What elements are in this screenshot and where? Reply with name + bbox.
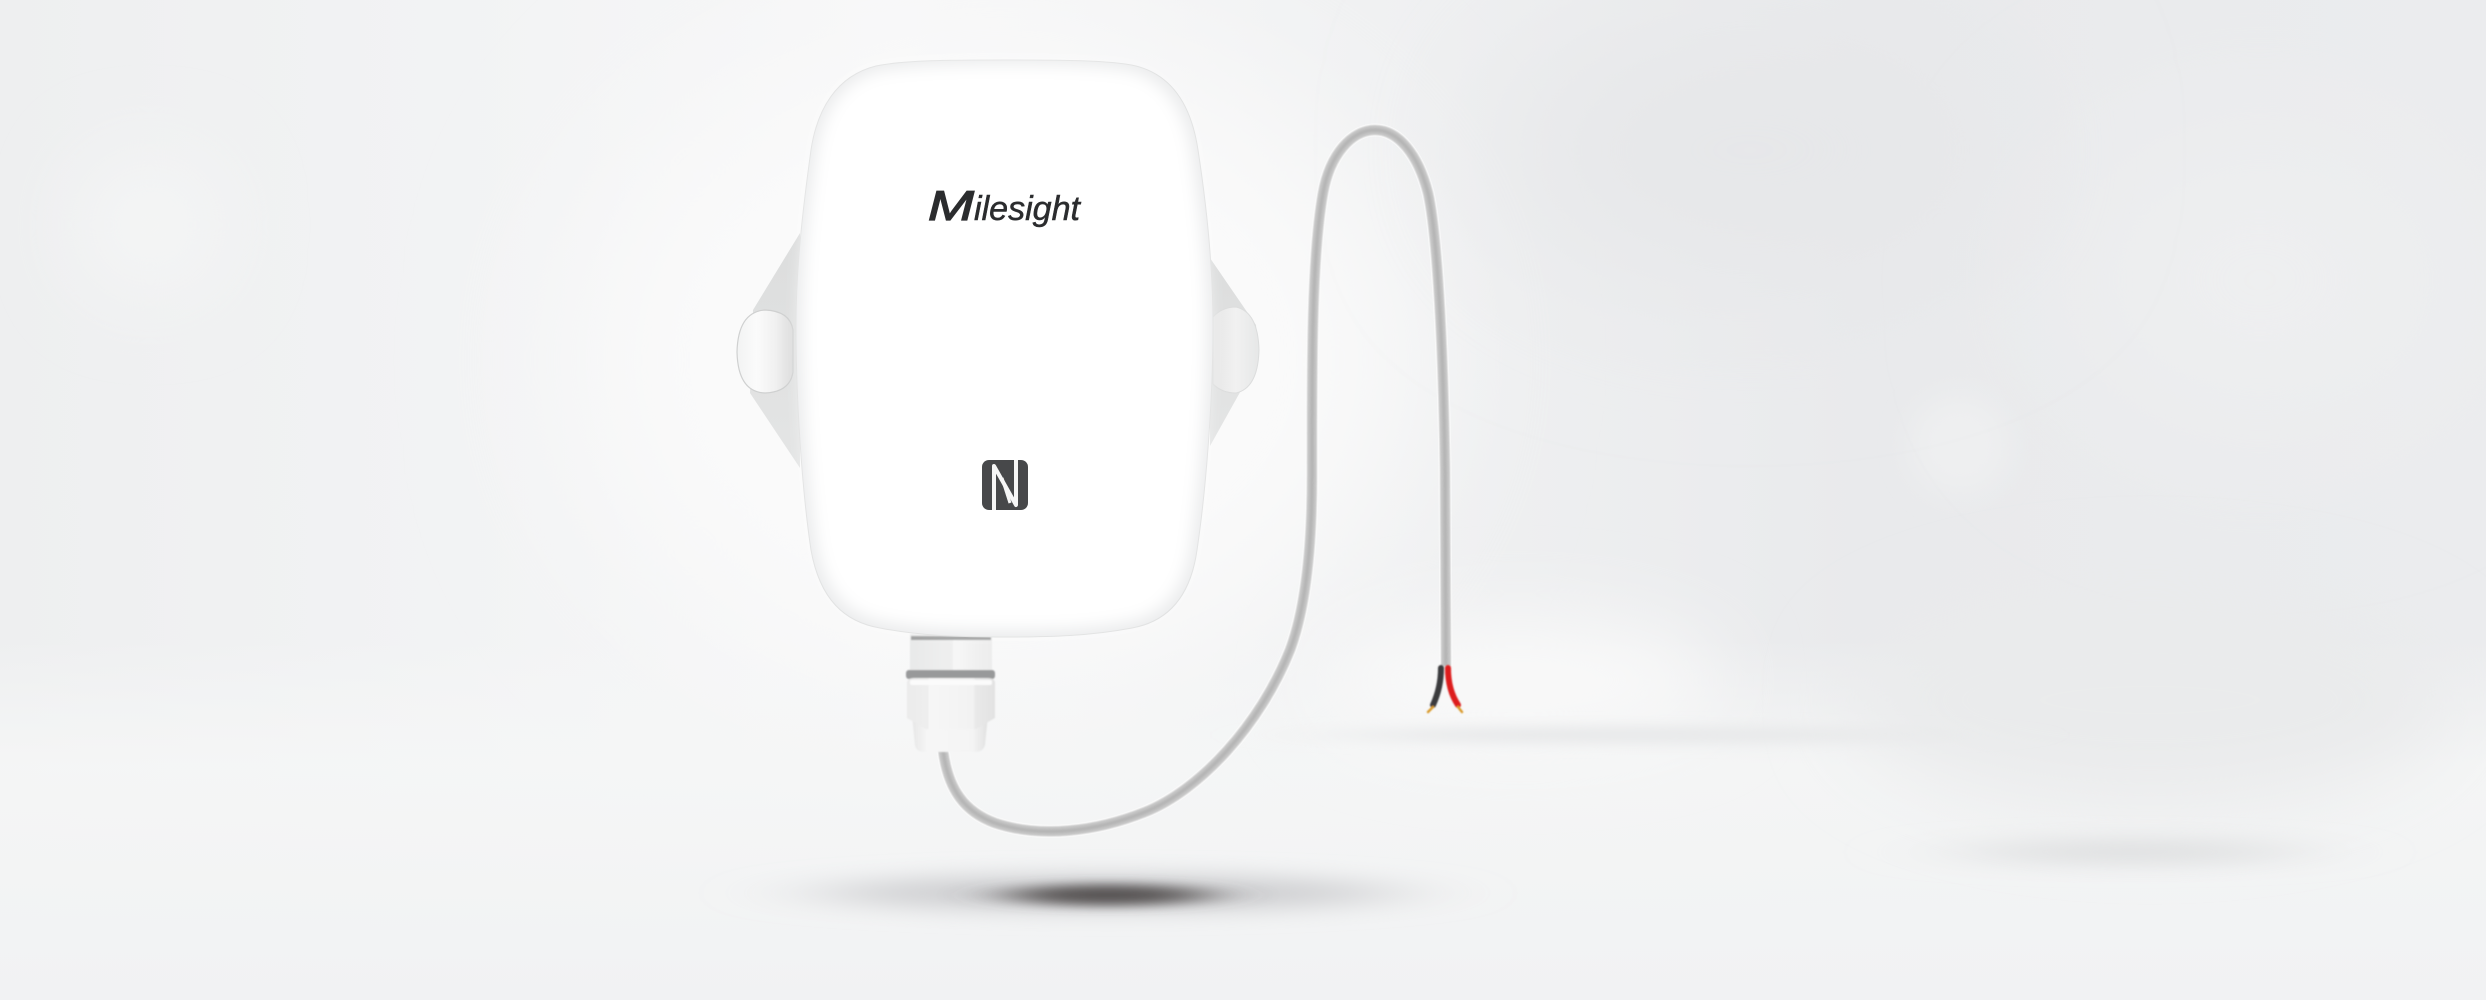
NFC icon — [982, 460, 1028, 510]
stripped wires — [1428, 668, 1462, 712]
copper tips — [1428, 707, 1462, 712]
mounting ear right — [1210, 258, 1259, 446]
right knob — [1213, 307, 1259, 393]
left knob — [737, 310, 793, 393]
thread ring — [906, 670, 995, 679]
lower hex nut — [907, 678, 995, 729]
floor shadow — [818, 875, 1398, 911]
cable — [943, 130, 1446, 831]
red wire — [1448, 668, 1458, 705]
black wire — [1433, 668, 1441, 705]
cable gland — [906, 634, 995, 752]
brand logo: M — [928, 182, 974, 229]
brand logo: ilesight — [974, 190, 1082, 228]
upper hex nut — [910, 634, 992, 673]
brand logo — [928, 182, 1082, 229]
mounting ear left — [737, 233, 800, 468]
gland tip — [912, 715, 988, 752]
device body — [796, 60, 1213, 637]
